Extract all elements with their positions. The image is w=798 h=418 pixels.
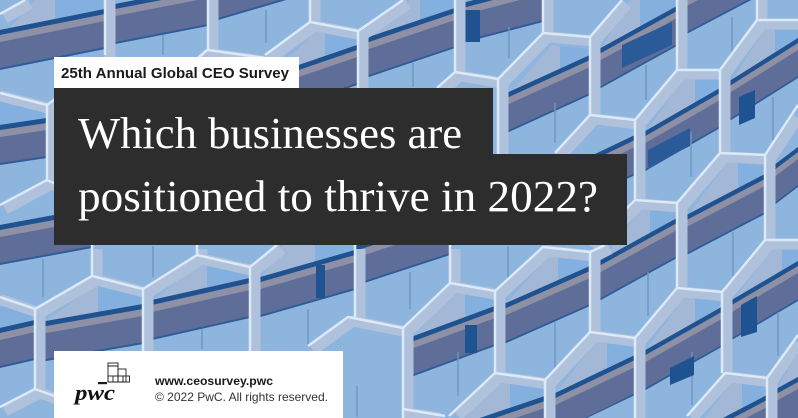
icon: PwC building logo	[98, 363, 130, 384]
footer panel	[54, 351, 343, 418]
website: www.ceosurvey.pwc	[154, 374, 273, 388]
logo wordmark: pwc	[73, 380, 115, 405]
copyright: © 2022 PwC. All rights reserved.	[155, 390, 328, 404]
survey label	[54, 57, 299, 88]
survey label: 25th Annual Global CEO Survey	[61, 65, 290, 82]
title panel	[54, 88, 627, 245]
title text	[78, 109, 598, 221]
title text: Which businesses are	[78, 109, 462, 158]
title text: positioned to thrive in 2022?	[78, 172, 598, 221]
